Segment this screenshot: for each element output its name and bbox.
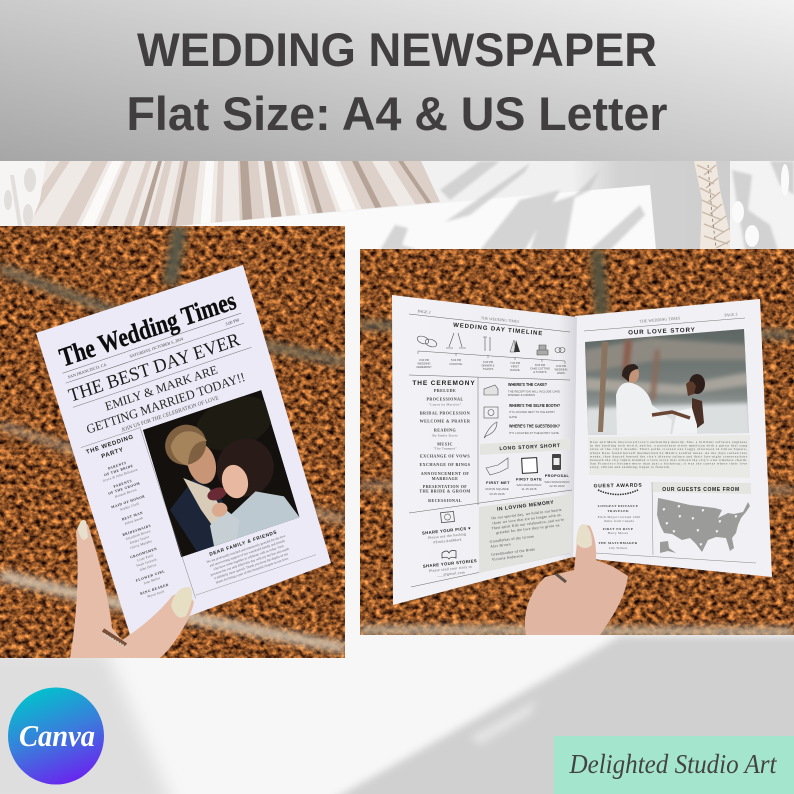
timeline labels: COCKTAIL [449,362,463,366]
long story short milestones: SAN FRANCISCO [516,483,542,487]
wedding party column: BEST MAN [122,511,143,521]
long story short milestones: 11.15.2015 [521,487,537,491]
love story text panel: where Kate found herself mesmerized by Mark's soulful tunes. As the days turned into [590,451,747,455]
letter: dear family and friends: it infinitely more special. Thank you from the depths of our [214,551,289,580]
long story short milestones [485,474,570,496]
ceremony order list: PROCESSIONAL [426,396,464,402]
wedding party column: PARENTS [113,479,133,489]
sub headline: GETTING MARRIED TODAY!! [85,370,247,437]
panel: in loving memory: Alex Brown [490,542,511,549]
wedding party column: Hannah Brown [114,488,137,499]
decorative leaves [730,161,794,250]
page header: THE WEDDING TIMES [639,315,680,324]
heading band: long story short: LONG STORY SHORT [499,443,561,452]
US map with hearts: ♥ [678,504,681,510]
letter: dear family and friends: and unwavering support of our wonderful family and friends [209,538,286,568]
love story text panel: weeks, they danced beyond the city's diverse culture and their late-night conversations [590,454,748,459]
couple photo [142,387,303,557]
decorative pleated fan [4,161,440,226]
timeline labels: CAKE CUTTING [530,366,550,370]
wedding party column [81,426,196,620]
wedding party column: FLOWER GIRL [135,569,166,583]
wedding party column: PARTY [101,447,125,460]
sub headline: EMILY & MARK ARE [103,363,219,414]
guest awards: Lily Wilson [609,546,627,550]
ceremony order list: PRELUDE [434,388,456,393]
timeline labels: 9:00 PM [556,364,567,368]
title: Flat Size: A4 & US Letter [126,87,668,140]
US map with hearts: ♥ [735,514,738,520]
heading band: long story short [480,439,570,455]
ceremony order list [412,380,476,503]
letter: dear family and friends: We are profoundly touched and immensely grateful for the love [206,534,286,564]
timeline labels: WEDDING [554,368,568,372]
love story text panel: in the bustling tech world, and he, a passionate street musician with a guitar that sang [590,444,747,449]
ceremony order list: RECESSIONAL [428,498,462,503]
timeline labels: & TOASTS [533,370,547,374]
love story text panel: Kate and Mark discovered love's enchanting melody. She, a brilliant software engineer [590,440,748,445]
dateline: SATURDAY, OCTOBER 5, 2024 [129,336,185,360]
love story text panel: story, vibrant and enduring, began to flourish. [590,465,670,470]
share your pics and stories [419,511,478,579]
title [126,23,668,140]
ceremony order list: MUSIC [437,442,453,446]
FAQ text: DINNER & DRINKS [508,393,535,397]
long story short milestones: SAN FRANCISCO [544,480,570,484]
US map with hearts: ♥ [692,516,695,522]
long story short milestones: 12.25.2022 [549,484,565,488]
US map with hearts [657,498,750,553]
long story short milestones: 10.25.2015 [489,492,505,496]
ceremony order list: ANNOUNCEMENT OF [421,471,469,476]
page header: PAGE 2 [417,308,431,315]
timeline labels: 6:00 PM [483,360,494,364]
page header [409,308,570,332]
right hand holding the booklet [525,524,628,635]
panel: in loving memory: Victoria Anderson [492,554,523,562]
page header [584,311,745,331]
left hand holding the newspaper [70,520,194,658]
FAQ text: THE RECEPTION WILL INCLUDE CAKE [508,390,560,394]
guest awards: TRAVELED [607,509,629,513]
timeline labels: WEDDING [418,362,430,366]
share your pics and stories: SHARE YOUR STORIES [423,558,477,569]
guest awards: miles from Canada [604,519,634,523]
love story text panel: San Francisco became more than just a backdrop; it was the canvas where their love [590,462,748,466]
Canva logo: Canva [19,718,95,753]
ceremony order list: "The Trumpet" [433,446,457,450]
title: WEDDING NEWSPAPER [137,23,657,76]
ceremony order list: THE CEREMONY [412,380,476,387]
wedding party column: PARENTS [108,461,127,471]
US map with hearts: ♥ [716,529,719,535]
letter: dear family and friends [185,520,316,595]
love story text panel [588,435,750,478]
left photo: brick wall [0,226,345,658]
timeline labels: ENDS [557,371,565,375]
long story short milestones: FIRST MET [486,481,510,485]
decorative dried grass [694,161,734,250]
wedding party column: Ethan Smith [124,516,144,526]
ceremony order list: MARRIAGE [432,476,458,481]
wedding party column: OF THE GROOM [108,481,141,496]
wedding party column: Noah Jackson [136,557,157,568]
panel: in loving memory: Grandmother of the Bride [491,547,535,557]
ceremony order list: PRESENTATION OF [423,484,467,489]
panel: in loving memory: On our special day, we hold in our hearts [491,508,562,521]
timeline axis [418,351,565,364]
US map with hearts: ♥ [702,508,705,514]
wedding party column: GROOMSMEN [130,547,158,560]
wedding party column: MAID OF HONOR [111,494,146,509]
timeline icons [416,333,565,355]
FAQ text: GATE [509,415,517,419]
masthead: The Wedding Times [56,285,239,373]
page header: THE WEDDING TIMES [481,316,520,324]
FAQ text: WHERE'S THE CAKE? [508,382,547,387]
ceremony order list: EXCHANGE OF RINGS [419,462,471,467]
open booklet: right page [572,299,772,577]
letter: dear family and friends: hearts for being a part of this beautiful chapter in our lives. [215,556,290,585]
FAQ text: IT'S LOCATED NEXT TO THE ENTRY [509,410,555,414]
bottom shadow background [0,636,794,794]
left brochure: newspaper front page [36,265,331,638]
page header: PAGE 3 [724,311,738,318]
timeline labels: 3:00 PM [419,358,430,362]
ceremony order list: THE BRIDE & GROOM [419,488,471,494]
guest awards: GUEST AWARDS [594,483,642,489]
headline: THE BEST DAY EVER [66,329,243,407]
FAQ text: WHERE'S THE GUESTBOOK? [509,424,560,428]
open booklet: left page [392,295,577,605]
US map with hearts: ♥ [719,519,722,525]
long story short milestones: FIRST DATE [516,478,542,482]
wedding party column: BRIDESMAIDS [122,524,152,537]
timeline labels: DANCE [510,368,520,372]
FAQ icons [484,385,498,438]
dateline: SAN FRANCISCO, CA [67,362,107,381]
decorative strip: wall and paper [0,161,794,250]
heading: our love story: OUR LOVE STORY [628,327,696,336]
top title band [0,0,794,161]
letter: dear family and friends: who have come together to celebrate with us today. Your [213,544,285,571]
panel: in loving memory [479,494,572,573]
ceremony order list: By Emily Davis [432,434,458,438]
US map with hearts: ♥ [663,507,666,513]
guest awards: LONGEST DISTANCE [598,504,639,508]
wedding party column: Jane Miller [143,576,161,585]
FAQ text: WHERE'S THE SELFIE BOOTH? [509,403,560,408]
love story text panel: beneath the city lights kindled a love story that echoed the city's own timeless charm. [590,458,747,462]
wedding party column: Emma Taylor [129,534,151,545]
timeline labels: 5:00 PM [451,358,462,362]
dateline [63,313,244,383]
shop name badge [554,736,794,794]
timeline labels: 7:00 PM [510,361,521,365]
ceremony order list: WELCOME & PRAYER [420,418,470,424]
guest awards: Erich Mayer traveled 1200 [598,515,640,519]
FAQ text [508,382,560,435]
share your pics and stories: Please send your story to [429,565,472,573]
wedding party column: Wyatt Scott [147,589,165,599]
ceremony order list: "Canon by Marriott" [429,402,462,406]
dateline: 3:00 PM [225,317,240,327]
guest awards [594,482,653,555]
US map with hearts: ♥ [673,529,676,535]
timeline labels: 8:00 PM [535,363,546,367]
ceremony order list: EXCHANGE OF VOWS [420,454,470,458]
long story short milestones: PROPOSAL [545,474,570,478]
heading band: our guests come from: OUR GUESTS COME FROM [662,487,740,493]
wedding party column: Sophia Clark [120,501,140,512]
long story short milestones: UNION SQUARE [485,487,509,491]
letter: dear family and friends: presence has not only filled this day with joy but has also made [210,547,290,577]
love story text panel: tales of the city's dreams. Their paths crossed one foggy afternoon in Union Square, [590,447,747,452]
heading band: our guests come from [653,482,751,494]
sub headline: JOIN US FOR THE CELEBRATION OF LOVE [121,395,220,434]
US map with hearts: ♥ [697,528,700,534]
panel: in loving memory: IN LOVING MEMORY [497,500,555,513]
wedding party column: Liam Patel [137,553,154,562]
wedding party column: Grace & John Robinson [102,467,138,483]
panel: in loving memory: Their spirit fills our celebration, and we're [491,518,565,532]
US map with hearts: ♥ [666,521,669,527]
ceremony order list: BRIDAL PROCESSION [420,410,470,416]
shop name badge: Delighted Studio Art [569,749,778,779]
love story photo [585,329,750,436]
wedding party column: Elizabeth Brown [126,529,151,541]
wedding party column: THE WEDDING [86,434,135,456]
right photo: brick wall [360,249,794,635]
panel: in loving memory: those we love that are no longer with us. [492,513,562,525]
ceremony order list: READING [434,428,456,432]
heading: wedding day timeline: WEDDING DAY TIMELINE [453,323,543,337]
US map with hearts: ♥ [700,542,703,548]
wedding party column: Olivia Murphy [130,539,153,550]
Canva logo [8,688,104,784]
share your pics and stories: SHARE YOUR PICS ♥ [422,526,471,536]
share your pics and stories: ___@gmail.com [436,570,465,577]
timeline labels: CEREMONY [416,365,432,369]
FAQ text: IT'S LOCATED AT THE ENTRY GATE [509,431,559,435]
US map with hearts: ♥ [679,514,682,520]
long story short icons [486,454,561,475]
wedding party column: RING BEARER [140,583,169,596]
timeline labels: DINNER & [482,364,495,368]
letter: dear family and friends: DEAR FAMILY & FRIENDS [209,529,278,558]
wedding party column: John Harris [139,562,157,572]
guest awards: FIRST TO RSVP [603,527,633,531]
timeline labels: FIRST [511,364,519,368]
guest awards: THE MATCHMAKER [598,541,638,545]
panel: in loving memory: grateful for the love they've given us. [496,523,561,535]
panel: in loving memory: Grandfather of the Groom [489,534,534,544]
timeline labels: TOASTS [483,367,494,371]
timeline labels [416,358,568,375]
share your pics and stories: #EmilyAndMark [433,538,462,544]
guest awards: Harry Moore [608,531,629,535]
share your pics and stories: Please use the hashtag [428,532,466,540]
wedding party column: OF THE BRIDE [104,464,134,477]
